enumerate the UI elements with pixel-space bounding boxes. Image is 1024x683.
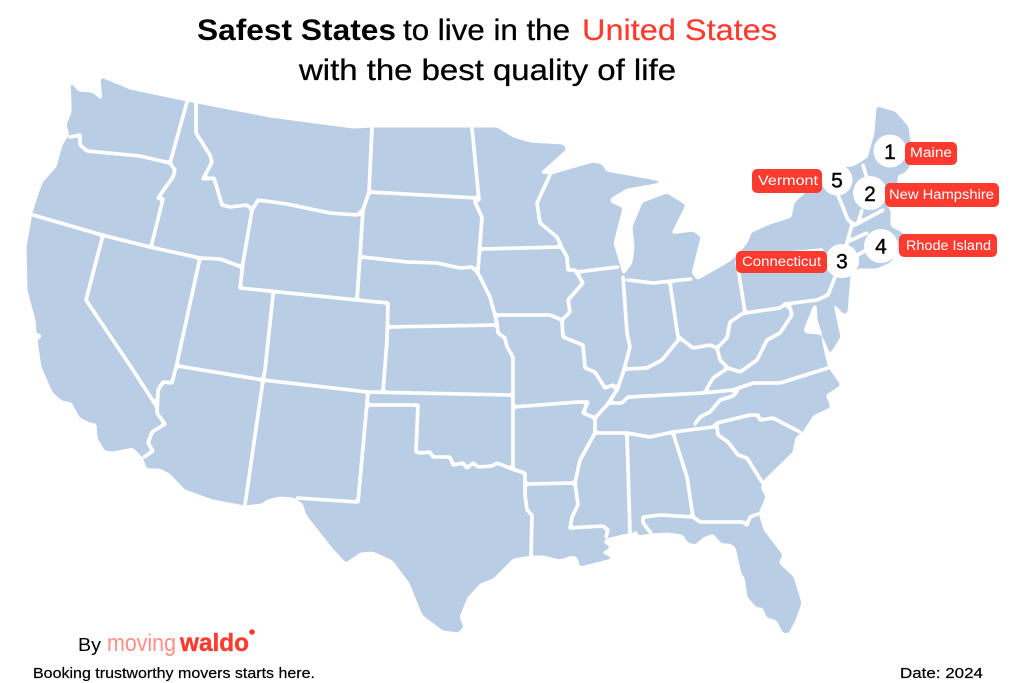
marker 4: Rhode Island: Rhode Island	[906, 238, 991, 253]
logo: By moving waldo: moving	[107, 630, 176, 657]
marker 1: Maine: Maine	[910, 145, 952, 160]
title: United States	[582, 14, 777, 47]
marker 4: Rhode Island: 4	[875, 236, 887, 258]
logo: By moving waldo: waldo	[179, 629, 249, 657]
state borders	[33, 102, 883, 557]
title: Safest States	[197, 14, 396, 47]
title: to live in the	[403, 14, 570, 47]
marker 5: Vermont	[752, 164, 852, 196]
marker 5: Vermont: 5	[831, 170, 843, 192]
logo: By moving waldo: By	[78, 635, 101, 655]
land silhouette	[27, 78, 910, 633]
marker 1: Maine: 1	[884, 141, 896, 164]
marker 2: New Hampshire: 2	[864, 183, 876, 206]
tagline: Booking trustworthy movers starts here.	[33, 666, 315, 682]
marker 1: Maine	[874, 134, 957, 168]
marker 2: New Hampshire	[853, 176, 999, 210]
logo: By moving waldo	[78, 629, 255, 657]
marker 4: Rhode Island	[864, 229, 997, 263]
marker 3: Connecticut: Connecticut	[742, 254, 821, 269]
map: United States	[27, 78, 910, 633]
title: with the best quality of life	[298, 54, 676, 87]
marker 2: New Hampshire: New Hampshire	[889, 187, 994, 202]
date: Date: 2024	[900, 666, 983, 682]
marker 3: Connecticut	[736, 244, 859, 278]
marker 5: Vermont: Vermont	[758, 173, 818, 188]
marker 3: Connecticut: 3	[836, 250, 848, 274]
title	[197, 14, 777, 87]
